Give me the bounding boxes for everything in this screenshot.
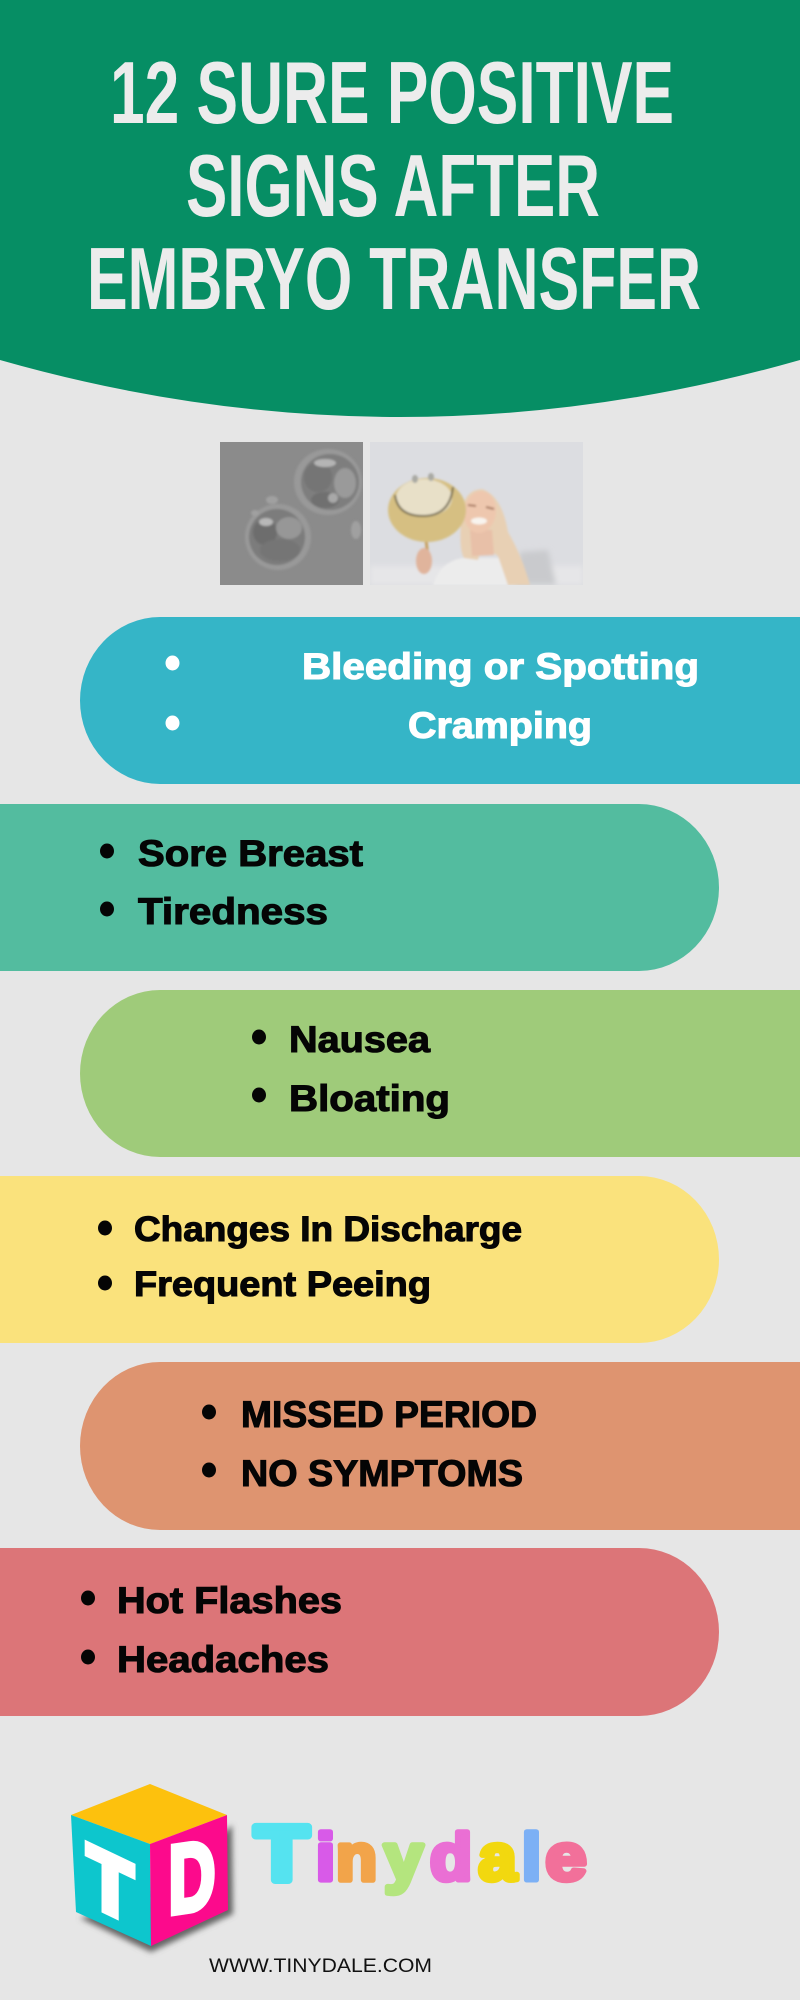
text: Cramping: Cramping — [408, 705, 592, 746]
logo wordmark: Tinydale: e — [546, 1820, 586, 1894]
bullets — [81, 1590, 95, 1664]
logo wordmark: Tinydale — [255, 1811, 586, 1897]
logo icon: TD cube — [71, 1784, 233, 1952]
text: Changes In Discharge: Changes In Discharge — [134, 1210, 522, 1249]
panel: bleeding or spotting, cramping — [80, 617, 800, 784]
photo: embryos under microscope — [220, 442, 363, 585]
bullets — [100, 844, 114, 916]
text: MISSED PERIOD: MISSED PERIOD — [241, 1394, 537, 1435]
logo wordmark: Tinydale: T — [255, 1811, 308, 1897]
text: Nausea: Nausea — [289, 1019, 430, 1060]
logo icon: TD cube: T — [87, 1826, 133, 1942]
text: Bloating: Bloating — [289, 1078, 450, 1119]
logo wordmark: Tinydale: l — [522, 1820, 541, 1894]
logo icon: TD cube: D — [168, 1819, 215, 1935]
logo wordmark: Tinydale: i — [316, 1820, 335, 1894]
text: Sore Breast: Sore Breast — [138, 833, 363, 874]
text: Hot Flashes: Hot Flashes — [117, 1580, 342, 1621]
bullets — [98, 1220, 112, 1290]
text: Headaches: Headaches — [117, 1639, 329, 1680]
title: SIGNS AFTER — [186, 136, 600, 235]
photo: smiling woman with balloon — [370, 442, 583, 585]
text: NO SYMPTOMS: NO SYMPTOMS — [241, 1453, 523, 1494]
bullets — [202, 1404, 216, 1478]
bullets — [252, 1030, 266, 1102]
panel: nausea, bloating — [80, 990, 800, 1157]
website url: WWW.TINYDALE.COM — [209, 1956, 432, 1977]
logo wordmark: Tinydale: d — [430, 1820, 472, 1894]
panel: sore breast, tiredness — [0, 804, 719, 971]
logo wordmark: Tinydale: y — [384, 1820, 423, 1894]
header banner — [0, 0, 800, 417]
bullets — [166, 656, 180, 730]
logo wordmark: Tinydale: a — [478, 1820, 518, 1894]
text: Bleeding or Spotting: Bleeding or Spotting — [302, 646, 699, 687]
panel: missed period, no symptoms — [80, 1362, 800, 1530]
logo wordmark: Tinydale: n — [336, 1820, 377, 1894]
panel: hot flashes, headaches — [0, 1548, 719, 1716]
title — [87, 43, 701, 328]
panel: changes in discharge, frequent peeing — [0, 1176, 719, 1343]
text: Frequent Peeing: Frequent Peeing — [134, 1265, 431, 1304]
text: Tiredness: Tiredness — [138, 891, 328, 932]
